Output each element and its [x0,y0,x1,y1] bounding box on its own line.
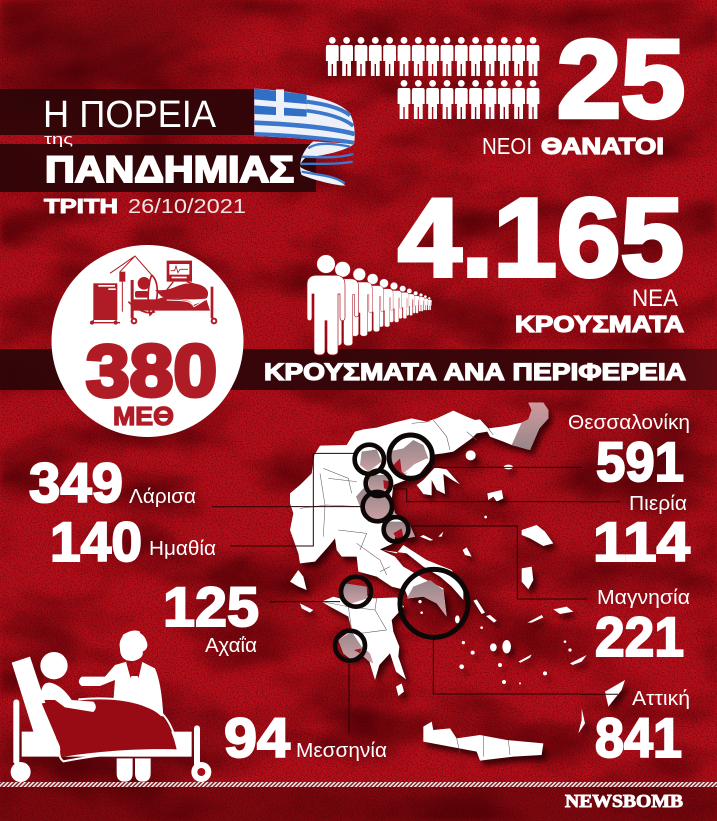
grey highlighted regions [338,403,548,663]
icon: ICU bed [90,256,217,325]
title band upper [0,89,254,135]
region highlight circles [335,435,468,661]
leader line tails [212,467,620,694]
Magnesia label: Μαγνησία [597,587,690,609]
deaths label: ΝΕΟΙ [482,133,532,159]
deaths label: ΘΑΝΑΤΟΙ [541,133,664,159]
cases label: ΚΡΟΥΣΜΑΤΑ [515,311,684,337]
backrest and bed [12,657,60,757]
dark red fragments in regions [354,458,408,653]
Messinia label: 94 [224,706,290,769]
title line 3: ΠΑΝΔΗΜΙΑΣ [45,149,294,190]
Magnesia label: 221 [595,605,684,668]
Pieria label: 114 [593,510,690,573]
upper ribbon [254,88,355,144]
icon: doctor and patient [11,631,211,782]
Messinia label: Μεσσηνία [296,740,387,762]
doctor [120,631,147,661]
hatched divider [0,782,717,787]
title line 1: Η ΠΟΡΕΙΑ [43,94,217,136]
cases label: ΝΕΑ [632,285,678,312]
Larisa label [29,451,196,514]
deaths: people pictogram [326,37,539,119]
Achaia label: Αχαΐα [205,635,257,657]
Imathia label: Ημαθία [149,538,216,560]
date: ΤΡΙΤΗ [44,196,118,218]
title block [0,89,316,218]
title line 2: της [44,131,73,148]
map land [290,403,625,761]
Larisa label: Λάρισα [129,486,196,508]
Thessaloniki label: 591 [596,430,684,493]
Achaia label: 125 [163,575,259,638]
Larisa label: 349 [29,451,123,514]
ICU number: 380 [86,331,217,412]
logo: NEWSBOMB [565,791,683,811]
patient [40,652,68,679]
leader lines [230,453,580,733]
icon: Greek flag ribbon [254,88,355,186]
Messinia label [224,706,387,769]
cases number: 4.165 [398,176,684,300]
Imathia label: 140 [50,510,142,573]
Thessaloniki label [568,412,690,493]
ICU label: ΜΕΘ [113,401,174,431]
Attica label: Αττική [632,688,690,710]
cases label [515,285,684,337]
lower ribbon loop [300,141,354,186]
regional boundaries [300,420,510,757]
date: 26/10/2021 [128,195,246,218]
Thessaloniki label: Θεσσαλονίκη [568,412,690,434]
blanket [42,699,177,757]
map of Greece [230,403,625,761]
regional heading: ΚΡΟΥΣΜΑΤΑ ΑΝΑ ΠΕΡΙΦΕΡΕΙΑ [264,359,686,386]
icon: queue of people [307,255,432,355]
panel: ICU circle [52,245,244,437]
title band lower [0,144,316,192]
regional band [0,349,717,390]
Pieria label: Πιερία [629,493,687,515]
Imathia label [50,510,216,573]
Attica label: 841 [595,706,682,769]
deaths number: 25 [557,18,685,141]
